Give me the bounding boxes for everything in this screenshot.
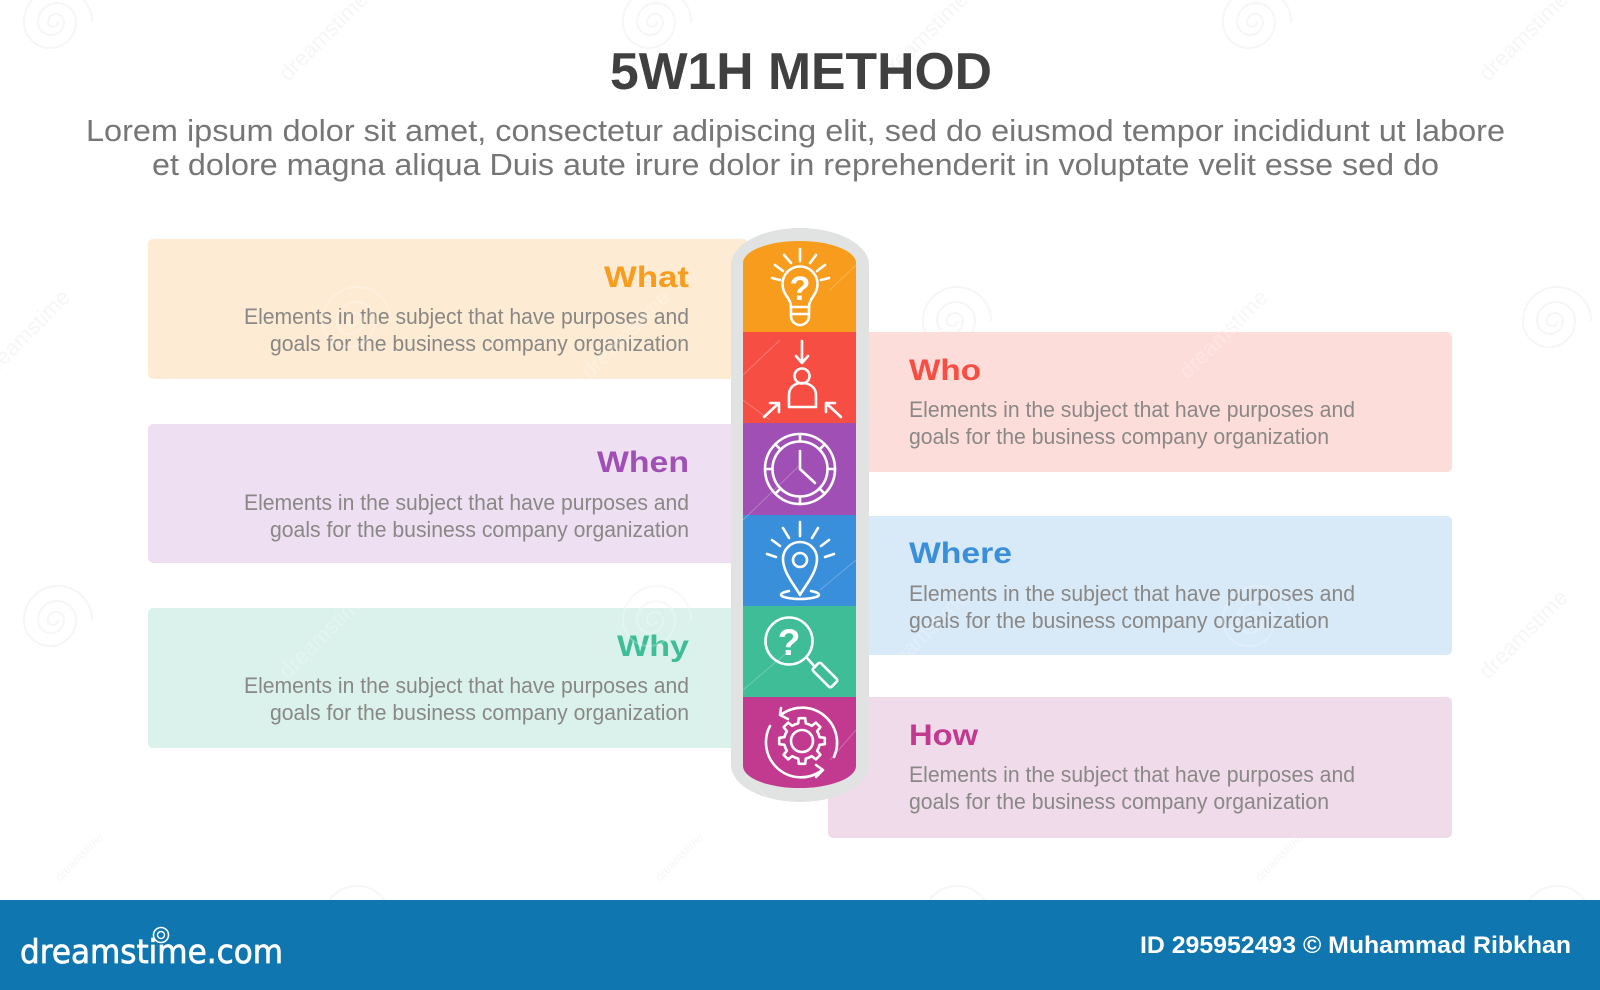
panel: why xyxy=(148,608,748,748)
background watermark: dreamstime xyxy=(52,830,107,884)
footer bar xyxy=(0,900,1600,990)
background watermark: dreamstime xyxy=(652,830,707,884)
panel: where xyxy=(852,516,1452,655)
panel: what xyxy=(148,239,748,379)
subtitle: et dolore magna aliqua Duis aute irure dolor in reprehenderit in voluptate velit esse sed do xyxy=(152,147,1439,182)
panel: how: goals for the business company organization xyxy=(909,789,1329,814)
foreground watermark: dreamstime xyxy=(1174,285,1273,384)
panel: when xyxy=(148,424,748,563)
panel: how xyxy=(828,697,1452,838)
icon: magnifier question: ? xyxy=(778,622,800,663)
panel: why: Why xyxy=(617,630,689,663)
panel: when: Elements in the subject that have purposes and xyxy=(244,490,689,515)
subtitle xyxy=(86,113,1505,182)
logo: dreamstime.com xyxy=(20,932,283,971)
panel: when: goals for the business company organization xyxy=(270,517,689,542)
icon: light bulb question: ? xyxy=(790,270,810,308)
panel: who: goals for the business company organization xyxy=(909,424,1329,449)
panel: who: Who xyxy=(909,354,981,387)
image credit: ID 295952493 © Muhammad Ribkhan xyxy=(1140,932,1571,959)
panel: what: Elements in the subject that have purposes and xyxy=(244,304,689,329)
panel: when: When xyxy=(597,446,689,479)
title: 5W1H METHOD xyxy=(610,43,992,101)
subtitle: Lorem ipsum dolor sit amet, consectetur adipiscing elit, sed do eiusmod tempor incididunt ut labore xyxy=(86,113,1505,148)
panel: where: Elements in the subject that have purposes and xyxy=(909,581,1355,606)
background watermark: dreamstime xyxy=(1474,585,1573,684)
foreground watermark xyxy=(274,265,1291,800)
panel: where: Where xyxy=(909,537,1012,570)
panel: why: goals for the business company organization xyxy=(270,700,689,725)
icon: location pin xyxy=(767,522,834,599)
panel: where: goals for the business company organization xyxy=(909,608,1329,633)
panel: who: Elements in the subject that have purposes and xyxy=(909,397,1355,422)
icon: clock xyxy=(765,434,835,504)
panel: how: How xyxy=(909,719,979,752)
icon: magnifier question xyxy=(766,618,838,688)
icon: gear cycle xyxy=(766,708,837,777)
background watermark: dreamstime xyxy=(1252,830,1307,884)
panel: how: Elements in the subject that have purposes and xyxy=(909,762,1355,787)
panel: who xyxy=(852,332,1452,472)
icon: light bulb question xyxy=(772,249,829,325)
panel: what: What xyxy=(604,261,689,294)
background watermark: dreamstime xyxy=(1174,285,1273,384)
central pill xyxy=(731,228,869,802)
panel: what: goals for the business company organization xyxy=(270,331,689,356)
panel: why: Elements in the subject that have purposes and xyxy=(244,673,689,698)
foreground watermark: dreamstime xyxy=(874,585,973,684)
icon: person with arrows xyxy=(764,341,841,417)
foreground watermark: dreamstime xyxy=(274,585,373,684)
foreground watermark: dreamstime xyxy=(576,285,675,384)
